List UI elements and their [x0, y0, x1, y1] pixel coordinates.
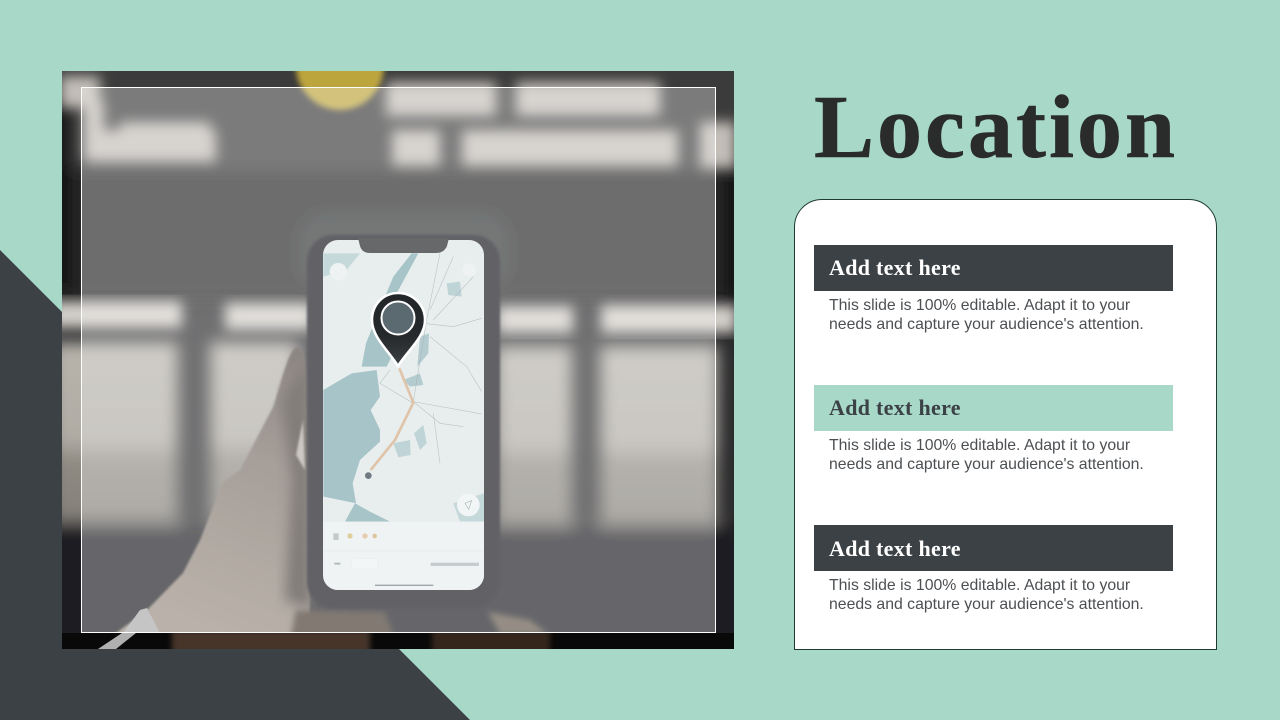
text item 1 [814, 245, 1173, 333]
photo: hand holding phone with map [62, 71, 734, 649]
panel: white text card [794, 199, 1217, 650]
item 1 heading: Add text here [829, 255, 961, 280]
translucent photo overlay [81, 87, 716, 633]
phone screen with map [323, 240, 487, 593]
item 2 body text: needs and capture your audience's attention. [829, 456, 1144, 473]
phone notch [358, 238, 449, 253]
item 3 body text: This slide is 100% editable. Adapt it to your [829, 577, 1130, 594]
item 1 body text: This slide is 100% editable. Adapt it to your [829, 297, 1130, 314]
item 1 heading [814, 245, 1173, 291]
item 2 body text: This slide is 100% editable. Adapt it to your [829, 437, 1130, 454]
icon: location pin [372, 293, 425, 366]
phone body [307, 235, 500, 608]
item 3 body text: needs and capture your audience's attention. [829, 596, 1144, 613]
blurred station background [30, 22, 770, 665]
bottom photo strip [62, 633, 734, 649]
text item 3 [814, 525, 1173, 613]
item 2 body text [829, 437, 1144, 473]
item 3 heading: Add text here [829, 536, 961, 561]
item 3 heading [814, 525, 1173, 571]
item 3 body text [829, 577, 1144, 613]
item 2 heading [814, 385, 1173, 431]
text item 2 [814, 385, 1173, 473]
item 1 body text [829, 297, 1144, 333]
item 2 heading: Add text here [829, 395, 961, 420]
white frame [82, 88, 716, 632]
hand [100, 347, 548, 645]
item 1 body text: needs and capture your audience's attention. [829, 316, 1144, 333]
title: Location [814, 78, 1178, 177]
